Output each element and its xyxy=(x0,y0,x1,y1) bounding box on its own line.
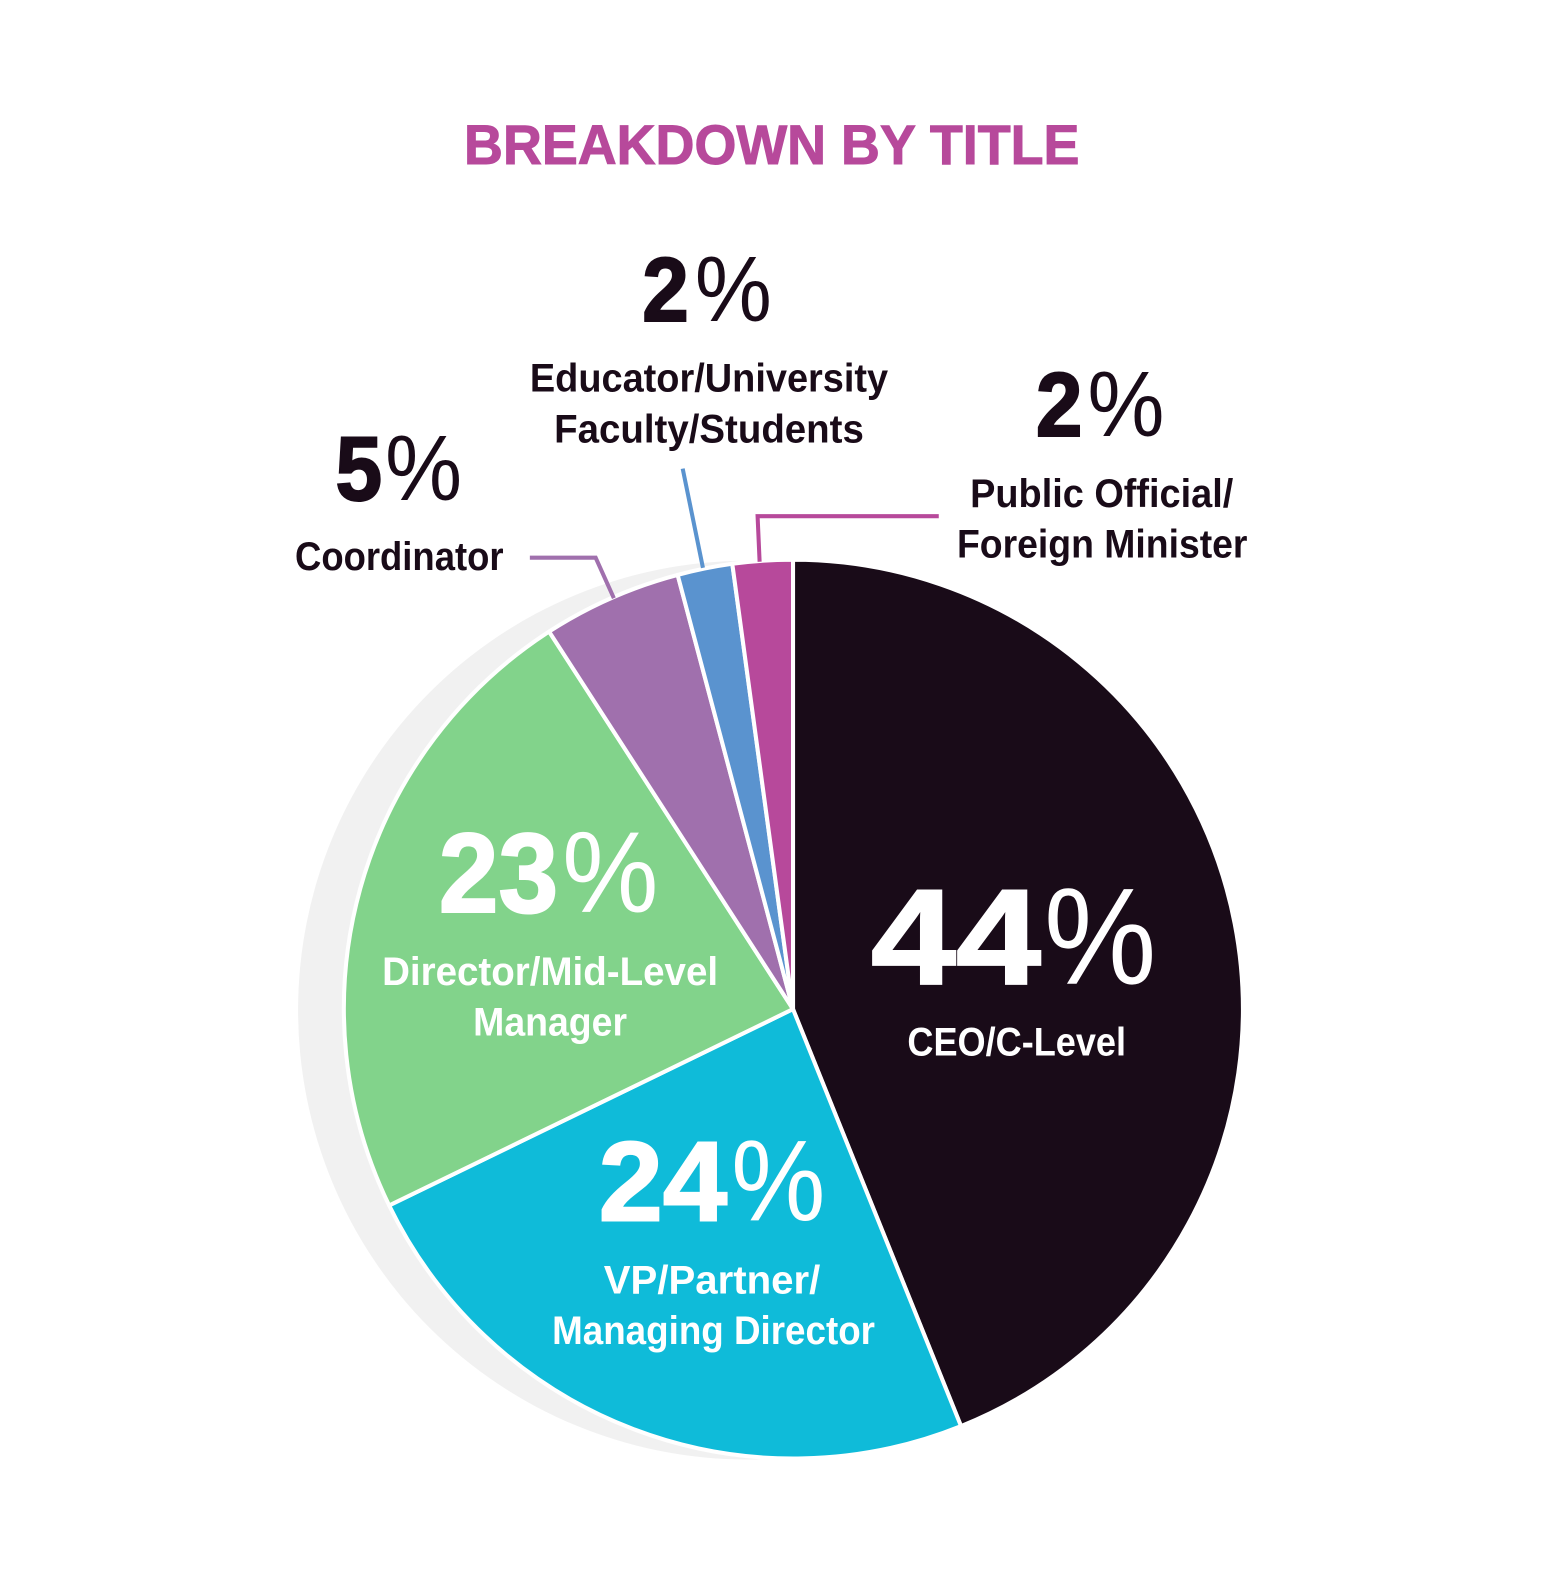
leader line: Public Official xyxy=(758,516,939,562)
pie chart xyxy=(344,560,1243,1459)
stat: Coordinator xyxy=(295,416,504,579)
stat: Educator/University Faculty/Students: Faculty/Students xyxy=(554,407,864,451)
stat: VP/Partner/Managing Director: Managing Director xyxy=(552,1309,875,1353)
stat: Coordinator: Coordinator xyxy=(295,535,504,579)
stat: CEO/C-Level: 44 xyxy=(871,861,1041,1013)
stat: Public Official/Foreign Minister: Foreign Minister xyxy=(957,523,1247,567)
leader line: Educator xyxy=(683,469,703,568)
pie shadow xyxy=(298,561,1197,1460)
stat: CEO/C-Level: CEO/C-Level xyxy=(907,1021,1126,1065)
stat: Educator/University Faculty/Students xyxy=(530,237,888,451)
stat: Educator/University Faculty/Students: % xyxy=(695,237,772,341)
stat: Public Official/Foreign Minister: 2 xyxy=(1036,355,1082,456)
stat: Director/Mid-Level Manager: 23 xyxy=(439,810,558,937)
stat: Coordinator: 5 xyxy=(336,419,382,520)
slice: Coordinator 5% xyxy=(549,575,793,1009)
stat: Educator/University Faculty/Students: 2 xyxy=(642,240,689,341)
slice: VP/Partner/Managing Director 24% xyxy=(389,1009,961,1459)
leader line: Coordinator xyxy=(530,558,614,598)
stat: Coordinator: % xyxy=(385,416,462,520)
stat: Educator/University Faculty/Students: Educator/University xyxy=(530,357,888,401)
stat: CEO/C-Level: % xyxy=(1044,860,1156,1014)
stat: Public Official/Foreign Minister: Public Official/ xyxy=(970,472,1233,516)
stat: VP/Partner/Managing Director: VP/Partner/ xyxy=(604,1259,820,1303)
slice: Director/Mid-Level Manager 23% xyxy=(344,632,793,1205)
stat: Director/Mid-Level Manager: % xyxy=(562,809,658,937)
slice: Public Official/Foreign Minister 2% xyxy=(732,560,793,1009)
stat: Director/Mid-Level Manager: Director/Mid-Level xyxy=(382,950,718,994)
stat: VP/Partner/Managing Director: % xyxy=(731,1118,825,1246)
stat: Director/Mid-Level Manager xyxy=(382,809,718,1044)
slice: Educator/University Faculty/Students 2% xyxy=(678,564,793,1009)
stat: CEO/C-Level xyxy=(871,860,1156,1065)
slice: CEO/C-Level 44% xyxy=(793,560,1243,1426)
stat: Director/Mid-Level Manager: Manager xyxy=(473,1000,627,1044)
stat: Public Official/Foreign Minister xyxy=(957,352,1247,567)
stat: VP/Partner/Managing Director xyxy=(552,1118,875,1353)
stat: VP/Partner/Managing Director: 24 xyxy=(599,1119,727,1246)
title: BREAKDOWN BY TITLE xyxy=(464,114,1079,176)
stat: Public Official/Foreign Minister: % xyxy=(1088,352,1164,456)
